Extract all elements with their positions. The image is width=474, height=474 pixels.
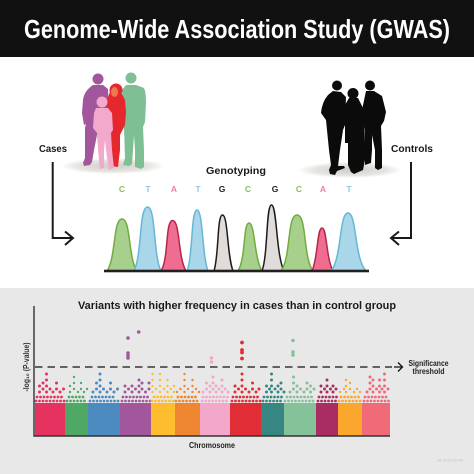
chromosome bars [35, 403, 390, 436]
label: cases: Cases [39, 143, 67, 155]
image credit id: 34-203722045 [437, 458, 463, 462]
DNA base sequence: A [320, 184, 326, 194]
label: significance threshold: Significance [408, 359, 449, 368]
x-axis label: Chromosome [189, 441, 235, 450]
DNA base sequence: G [219, 184, 226, 194]
Manhattan plot [34, 306, 402, 436]
significance threshold line with arrow [35, 362, 402, 372]
panel: cases group illustration [61, 72, 165, 174]
baseline dot rows [36, 397, 390, 401]
arrow: controls to genotyping [391, 162, 411, 245]
figure: right silhouette [362, 80, 386, 170]
DNA base sequence: T [145, 184, 151, 194]
DNA base sequence: A [171, 184, 177, 194]
figure: middle silhouette [345, 88, 365, 174]
DNA base sequence: C [296, 184, 302, 194]
DNA base sequence: T [195, 184, 201, 194]
DNA base sequence: T [346, 184, 352, 194]
y-axis label: -log₁₀ (P-value) [22, 342, 31, 392]
DNA base sequence [119, 184, 352, 194]
DNA base sequence: C [119, 184, 125, 194]
variant dots [40, 369, 388, 392]
figure: red woman [106, 84, 126, 167]
label: controls: Controls [391, 143, 433, 155]
outlier dots above threshold [126, 330, 295, 364]
chromatogram peaks [107, 205, 366, 271]
chart heading: Variants with higher frequency in cases than in control group [78, 300, 396, 312]
label: significance threshold: threshold [412, 367, 445, 376]
arrow: cases to genotyping [53, 162, 73, 245]
label: genotyping: Genotyping [206, 165, 266, 177]
axes [34, 306, 390, 436]
figure: left silhouette [321, 80, 346, 175]
DNA base sequence: C [245, 184, 251, 194]
label: significance threshold [408, 359, 449, 376]
DNA base sequence: G [272, 184, 279, 194]
panel: Manhattan plot background [0, 288, 474, 474]
figure: purple man [82, 74, 110, 166]
panel: controls group illustration [298, 80, 402, 178]
chromatogram baseline [104, 270, 369, 272]
figure: green man [122, 72, 146, 169]
figure: pink child [93, 96, 114, 170]
title banner [0, 0, 474, 57]
